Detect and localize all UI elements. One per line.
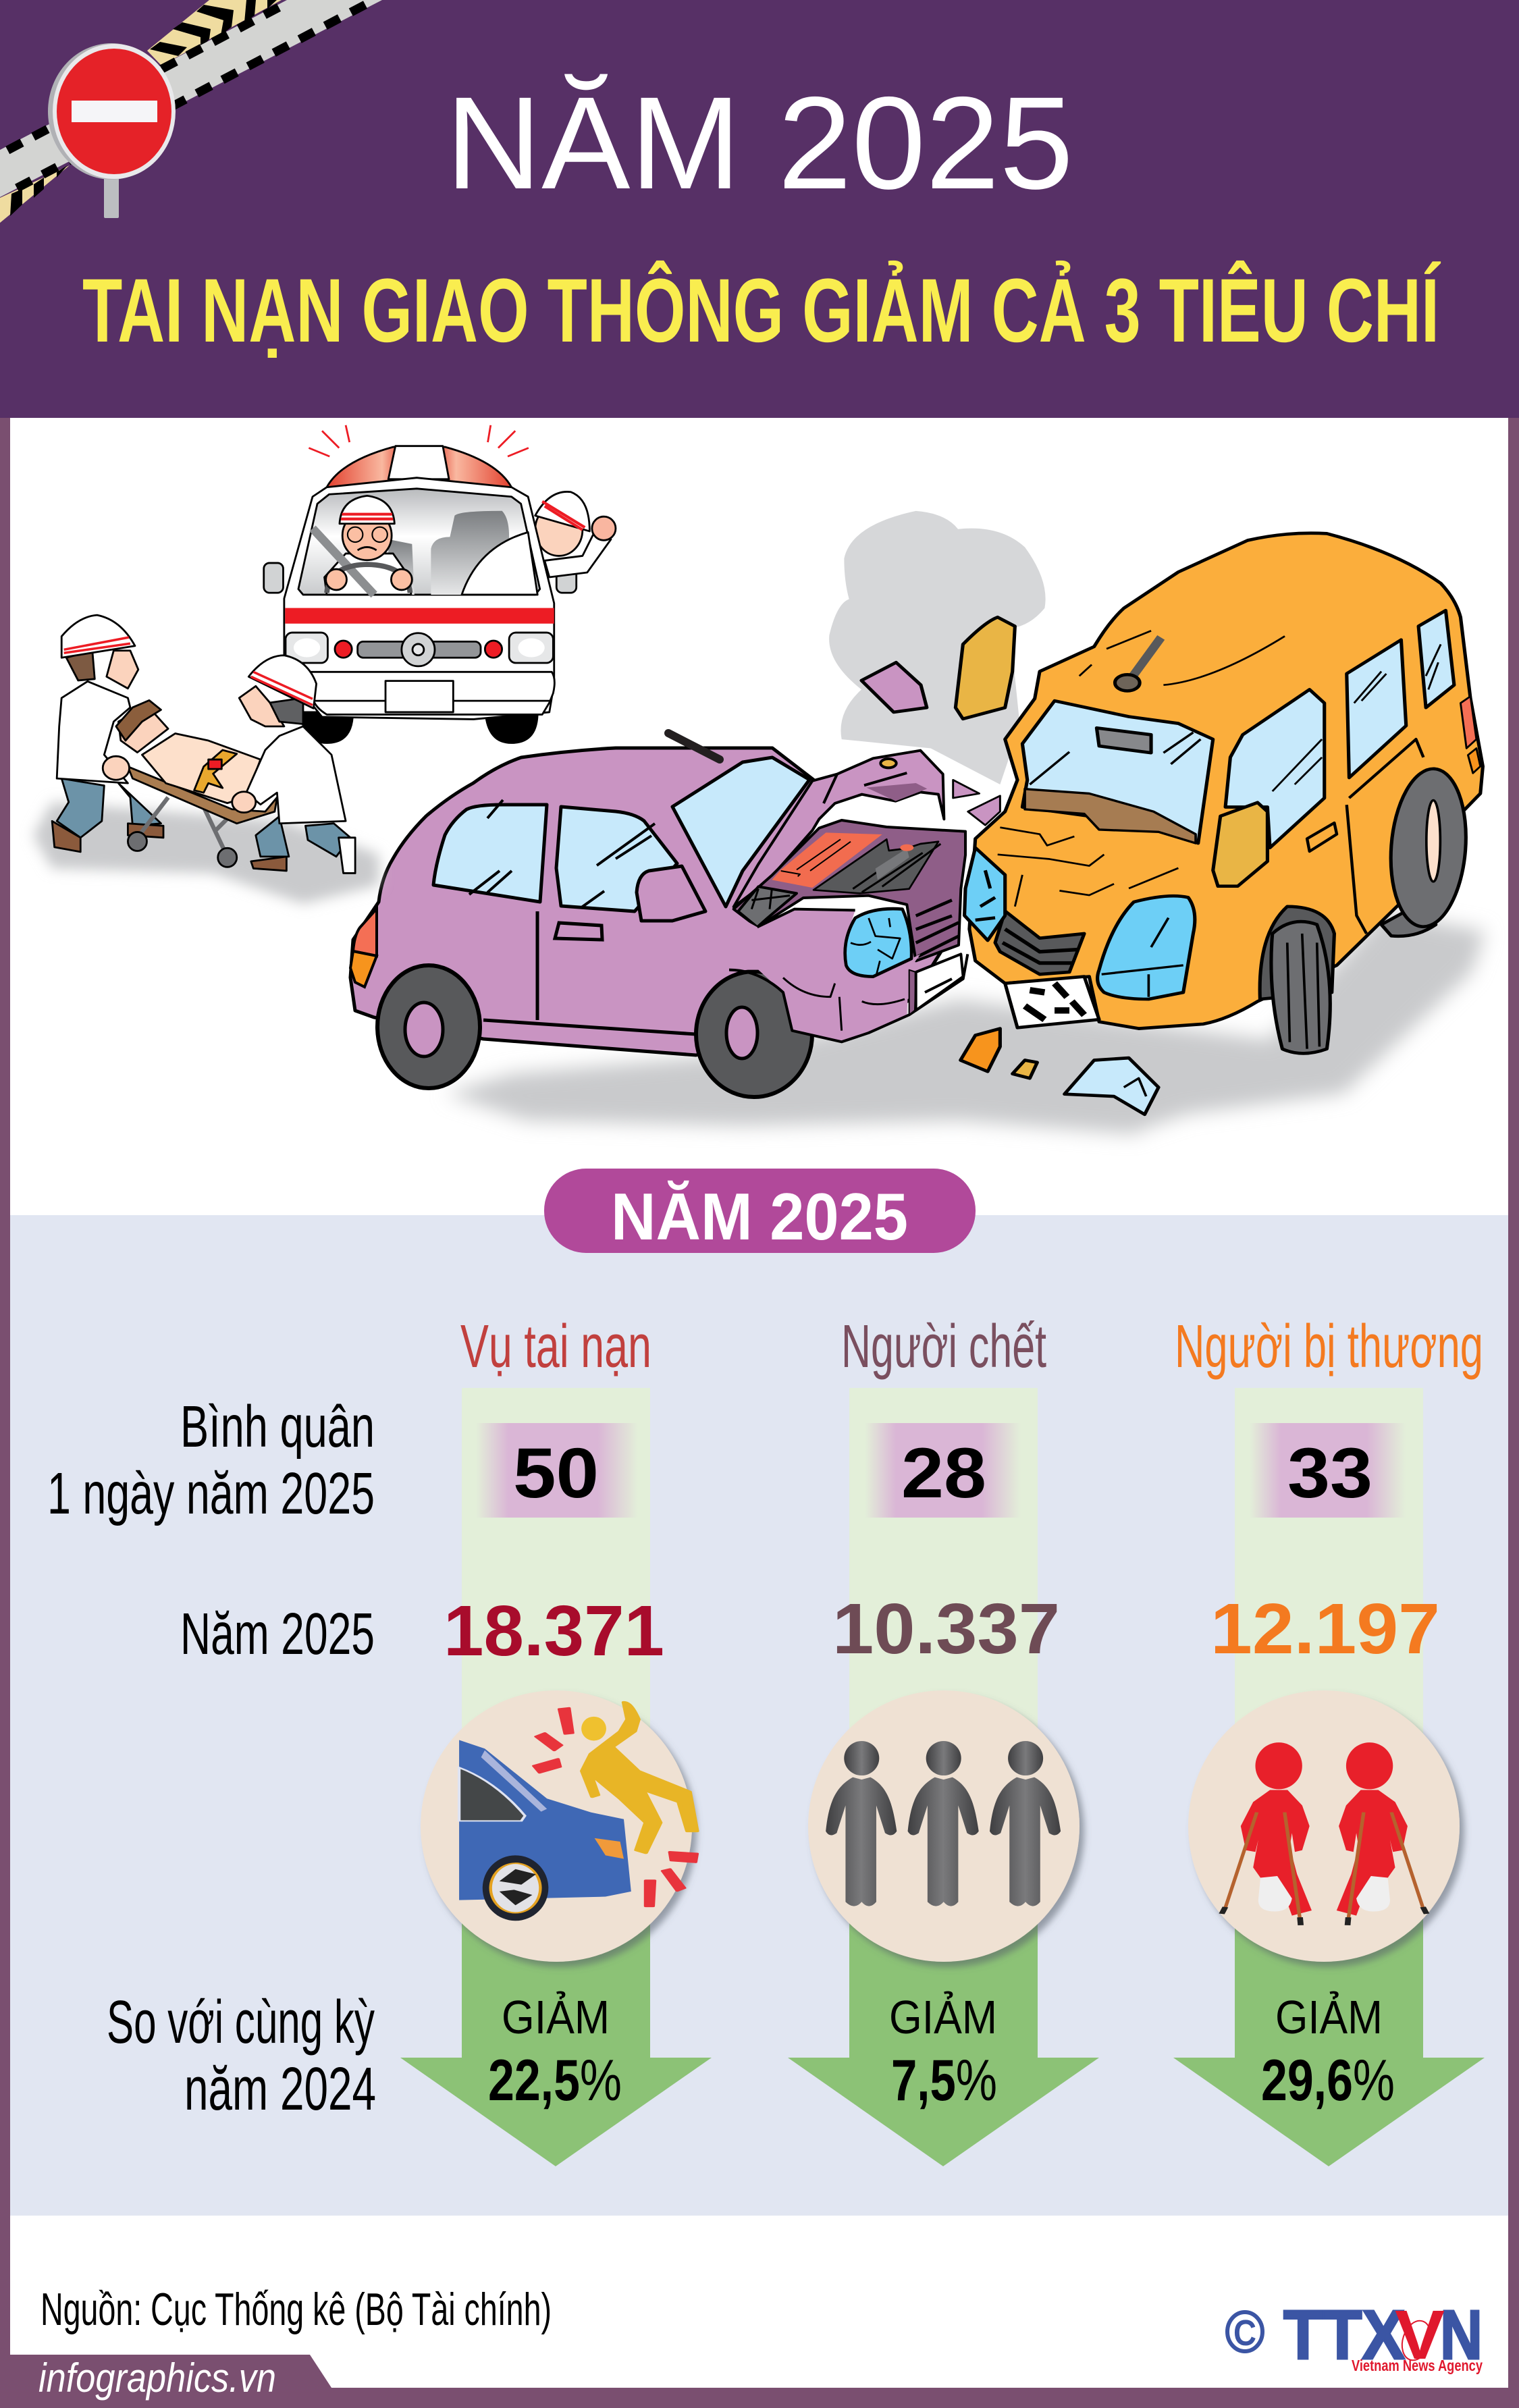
windshield	[1022, 701, 1213, 843]
bumper	[308, 672, 554, 714]
raised hood	[734, 751, 944, 907]
broken corner	[909, 970, 916, 1015]
right medic legs	[256, 816, 289, 857]
illustration: crash smoke	[829, 511, 1046, 784]
icon: three dark figures	[808, 1690, 1080, 1962]
website tab: infographics.vn	[38, 2355, 276, 2401]
illustration: ambulance	[264, 425, 616, 743]
logo: TTXVN: Vietnam News Agency	[1352, 2357, 1483, 2374]
daily figure: accidents: 50	[513, 1434, 599, 1513]
engine bay	[734, 820, 965, 961]
dented grille	[995, 911, 1084, 974]
row label: daily average: Bình quân	[180, 1394, 375, 1460]
stretcher bed	[128, 767, 277, 824]
right medic head	[239, 686, 284, 726]
decrease: injured: GIẢM	[1275, 1991, 1383, 2043]
row label: compared with 2024: So với cùng kỳ	[107, 1989, 375, 2056]
headlight	[845, 909, 911, 977]
headlights	[286, 633, 327, 663]
decrease: deaths: GIẢM	[889, 1991, 997, 2043]
van body	[969, 533, 1483, 1029]
white gap under hood	[819, 791, 979, 886]
rear wheel and hub	[1385, 766, 1472, 929]
decrease: accidents: 22,5%	[488, 2048, 622, 2113]
siren rays	[309, 425, 529, 456]
year total: injured: 12.197	[1210, 1589, 1440, 1669]
column: traffic accidents bar and arrow	[400, 1388, 712, 2166]
illustration: orange van	[965, 533, 1483, 1053]
car body	[350, 748, 945, 1055]
badge: year pill: NĂM 2025	[611, 1179, 908, 1254]
decrease: deaths	[889, 1991, 997, 2113]
panel: white illustration area	[10, 418, 1508, 1215]
icon: two red figures on crutches	[1188, 1690, 1460, 1962]
ground shadow	[33, 802, 379, 904]
shouting paramedic	[545, 532, 611, 577]
front wheel	[696, 971, 812, 1097]
rear side window	[433, 805, 547, 902]
dent creases	[998, 631, 1285, 907]
source note: Nguồn: Cục Thống kê (Bộ Tài chính)	[41, 2284, 552, 2335]
row label: daily average	[47, 1394, 375, 1526]
antenna	[1131, 637, 1161, 678]
title: NĂM 2025	[446, 70, 1073, 217]
illustration: crumpled front of the purple car	[729, 751, 979, 1042]
decrease: injured	[1261, 1991, 1395, 2113]
licence plate	[385, 681, 453, 712]
heading: accidents: Vụ tai nạn	[460, 1313, 651, 1381]
panel: white footer	[10, 2216, 1508, 2388]
crease lines	[783, 978, 905, 1031]
grille lines	[916, 900, 959, 957]
row label: daily average: 1 ngày năm 2025	[47, 1461, 375, 1526]
illustration: purple car	[350, 733, 945, 1097]
tyres	[300, 712, 537, 743]
daily figure: injured: 33	[1287, 1434, 1373, 1513]
row label: compared with 2024: năm 2024	[184, 2056, 376, 2123]
daily figure: deaths	[865, 1423, 1021, 1518]
daily figure: accidents	[476, 1423, 638, 1518]
paramedic arm in cab	[462, 532, 537, 595]
year total: deaths: 10.337	[832, 1589, 1060, 1669]
left medic head	[66, 651, 95, 680]
logo: TTXVN: N	[1440, 2296, 1483, 2374]
engine parts	[814, 839, 938, 893]
grille	[358, 641, 481, 658]
logo: TTXVN: TTX	[1283, 2296, 1405, 2374]
column: injured bar and arrow	[1173, 1388, 1485, 2166]
badge: year pill	[544, 1169, 976, 1254]
decrease: injured: 29,6%	[1261, 2048, 1395, 2113]
logo: TTXVN	[1227, 2296, 1483, 2374]
door lines	[1307, 739, 1423, 934]
patient	[142, 733, 261, 803]
icon: road barrier and no-entry sign	[0, 0, 382, 223]
windshield	[298, 489, 540, 595]
bumper face	[729, 909, 920, 1042]
number plate	[1005, 977, 1099, 1027]
panel: statistics background	[10, 1215, 1508, 2216]
front side window	[556, 807, 677, 911]
daily figure: injured	[1250, 1423, 1406, 1518]
windshield	[672, 757, 809, 907]
left medic coat	[57, 681, 130, 783]
decrease: deaths: 7,5%	[891, 2048, 997, 2113]
logo: TTXVN: C	[1233, 2313, 1256, 2353]
row label: year 2025: Năm 2025	[180, 1601, 375, 1667]
left medic hands	[103, 756, 130, 780]
front wheel	[1260, 907, 1334, 999]
side windows	[1225, 689, 1325, 848]
door mirror	[1213, 803, 1267, 886]
logo: TTXVN: V	[1395, 2296, 1445, 2374]
antenna	[668, 733, 720, 759]
door mirror	[637, 866, 705, 921]
mirrors	[264, 563, 283, 593]
illustration: paramedics with stretcher	[33, 615, 379, 904]
van body	[284, 478, 554, 719]
rear wheel	[377, 965, 480, 1088]
tail lights	[1460, 696, 1476, 748]
driver	[325, 554, 411, 595]
window reflections	[469, 800, 655, 908]
row label: compared with 2024	[107, 1989, 376, 2123]
rear wheel	[1381, 911, 1436, 936]
tail light	[353, 909, 377, 956]
daily figure: deaths: 28	[901, 1434, 986, 1513]
dashboard	[1025, 789, 1196, 843]
decrease: accidents	[488, 1991, 622, 2113]
right medic coat	[246, 726, 346, 824]
illustration: flying debris	[861, 617, 1158, 1115]
front headlight	[1098, 896, 1195, 999]
left medic legs	[118, 783, 161, 826]
red engine cover	[772, 832, 882, 888]
crash headlight	[965, 848, 1005, 940]
panel: header band	[0, 0, 1519, 418]
decrease: accidents: GIẢM	[502, 1991, 610, 2043]
column: deaths bar and arrow	[788, 1388, 1099, 2166]
heading: deaths: Người chết	[841, 1313, 1046, 1381]
dark battery corner	[738, 886, 797, 927]
rear-view mirror	[1096, 728, 1151, 753]
siren dome	[327, 447, 512, 487]
door seam and handle	[483, 911, 696, 1034]
icon: car hitting pedestrian	[421, 1690, 697, 1962]
year total: accidents: 18.371	[444, 1591, 664, 1671]
red stripe	[285, 608, 554, 624]
seats	[431, 511, 516, 595]
illustration: ground shadow of the vehicles	[446, 911, 1485, 1134]
stretcher frame	[137, 797, 232, 857]
